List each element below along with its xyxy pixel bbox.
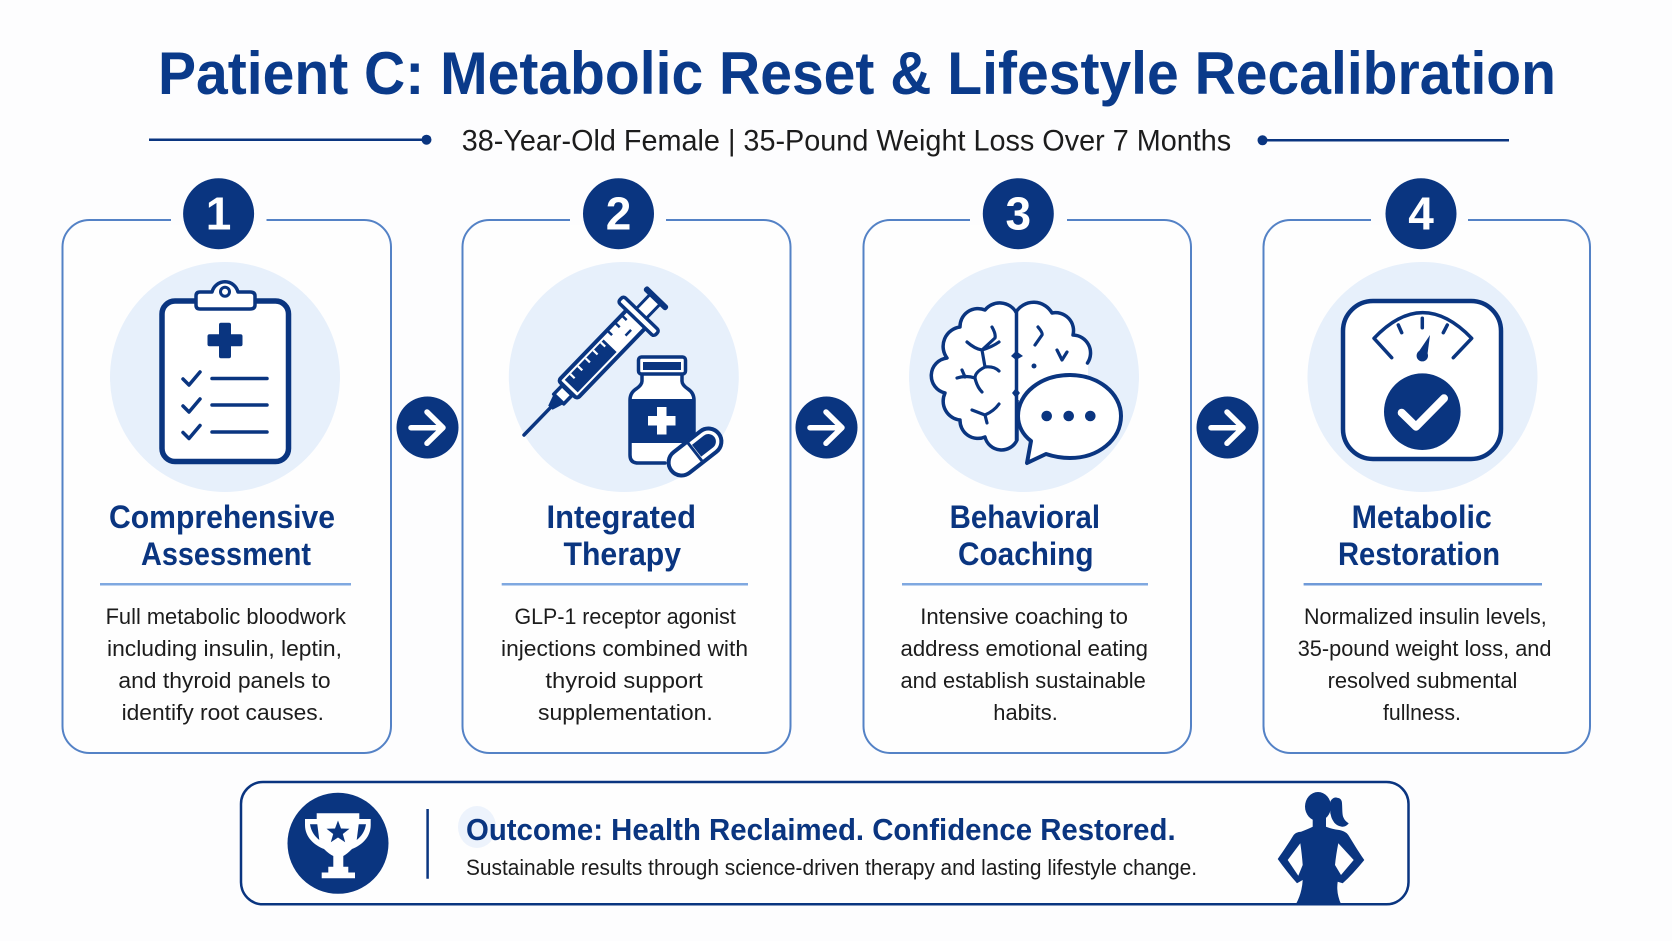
step description: resolved submental [1328,668,1517,693]
step description [106,604,347,725]
title: Patient C: Metabolic Reset & Lifestyle Recalibration [158,40,1556,107]
step heading: Comprehensive [109,499,335,535]
step heading: Integrated [546,499,696,535]
step number 1 [183,178,254,249]
step description: 35-pound weight loss, and [1298,636,1552,661]
step description: and establish sustainable [900,668,1146,693]
panel: step 4 metabolic restoration [1264,178,1590,753]
icon: syringe and medicine bottle [506,262,739,492]
step heading [546,499,696,572]
outcome text [458,806,1197,880]
step number 3: 3 [1006,188,1031,240]
outcome text: Sustainable results through science-driven therapy and lasting lifestyle change. [466,855,1197,880]
step description: Normalized insulin levels, [1304,604,1547,629]
step number 2 [583,178,654,249]
step heading: Assessment [141,536,311,572]
step heading: Therapy [564,536,681,572]
step heading [109,499,335,572]
step number 3 [983,178,1054,249]
icon: weight scale with check [1308,262,1538,492]
icon: woman silhouette [1278,792,1364,904]
step description: supplementation. [538,700,713,725]
step description: GLP-1 receptor agonist [514,604,737,629]
step description [900,604,1148,725]
step heading: Behavioral [950,499,1100,535]
icon: trophy [288,793,388,894]
icon: clipboard [110,262,340,492]
outcome text: Outcome: Health Reclaimed. Confidence Restored. [466,812,1176,847]
step description: identify root causes. [122,700,324,725]
step heading: Restoration [1338,536,1500,572]
panel: step 3 behavioral coaching [864,178,1191,753]
panel: step 1 comprehensive assessment [62,178,391,753]
step description: injections combined with [501,636,748,661]
icon: brain and speech bubble [909,262,1139,492]
step heading: Metabolic [1352,499,1492,535]
subtitle [149,125,1509,158]
step heading [1338,499,1500,572]
step number 4 [1386,178,1456,249]
step number 1: 1 [206,188,231,240]
step description [501,604,748,725]
step description: fullness. [1383,700,1461,725]
arrow 3 to 4 [1196,396,1258,458]
step description [1298,604,1552,725]
panel: step 2 integrated therapy [462,178,790,753]
subtitle: 38-Year-Old Female | 35-Pound Weight Loss Over 7 Months [462,125,1231,158]
step description: address emotional eating [900,636,1148,661]
arrow 1 to 2 [396,396,458,458]
step description: Full metabolic bloodwork [106,604,347,629]
outcome banner [241,782,1408,904]
arrow 2 to 3 [796,396,858,458]
step description: including insulin, leptin, [107,636,342,661]
step heading [950,499,1100,572]
step description: and thyroid panels to [118,668,331,693]
step description: Intensive coaching to [920,604,1128,629]
step description: thyroid support [545,668,703,693]
step number 2: 2 [606,188,631,240]
step number 4: 4 [1408,188,1434,240]
step description: habits. [993,700,1058,725]
step heading: Coaching [958,536,1094,572]
